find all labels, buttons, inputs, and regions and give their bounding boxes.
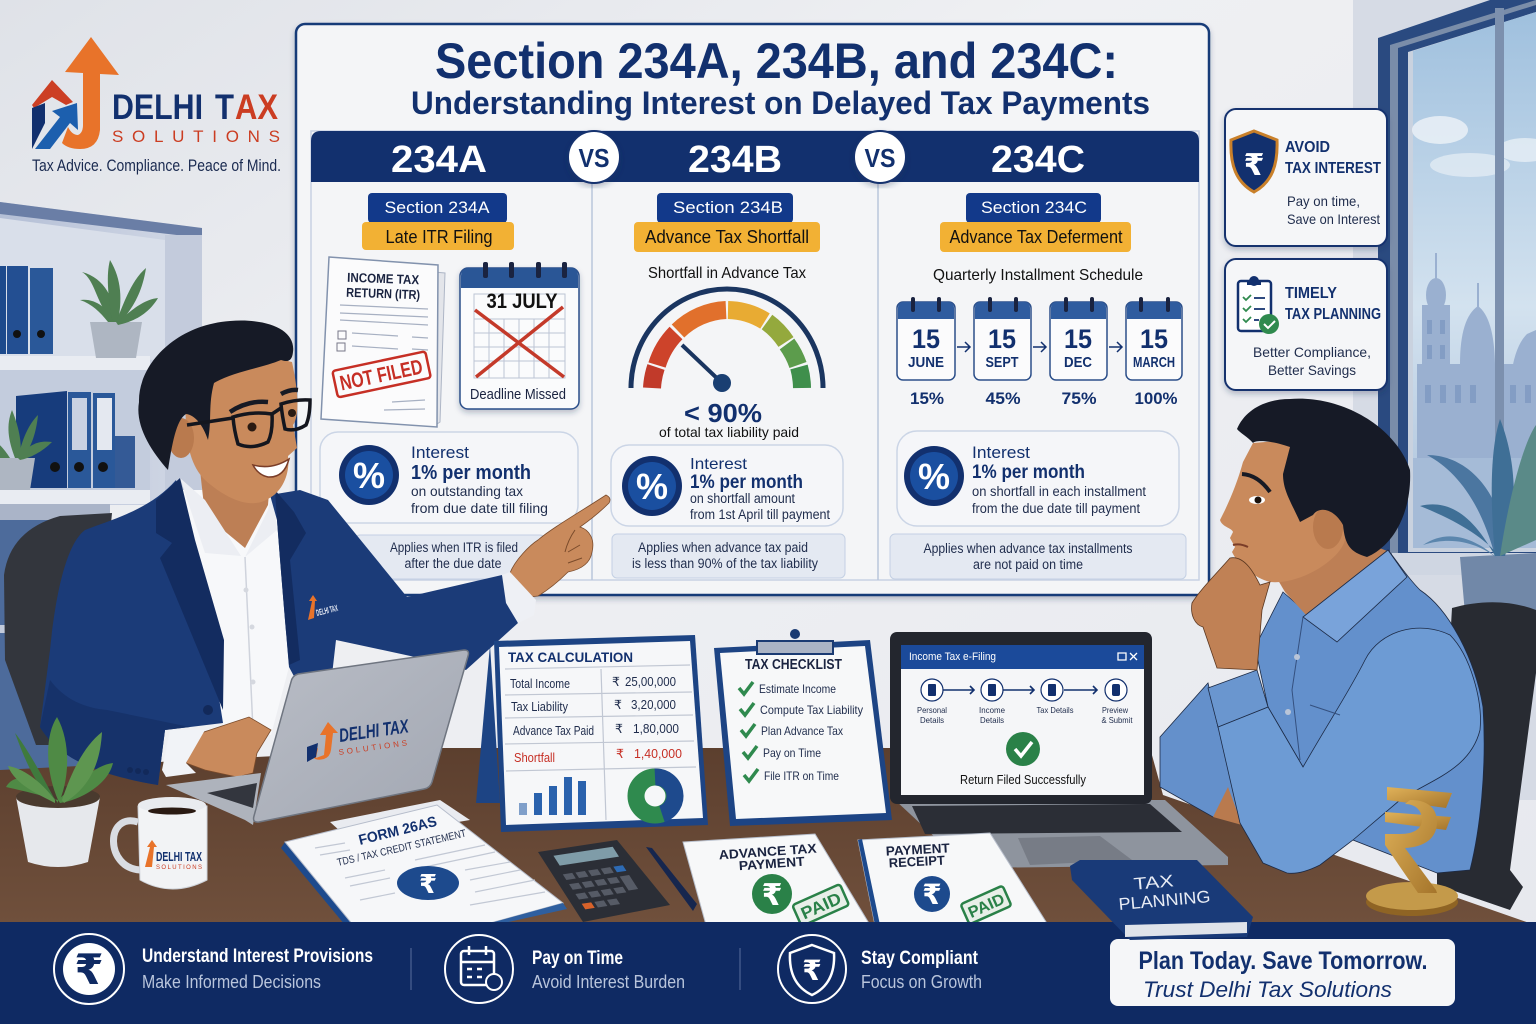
laptop logo text: DELHI TAX bbox=[338, 716, 411, 747]
step labels: Personal bbox=[917, 705, 947, 715]
table rows: 25,00,000 bbox=[625, 675, 676, 689]
table rows: 1,80,000 bbox=[633, 722, 679, 736]
calendar deadline missed: 31 JULY bbox=[486, 290, 558, 313]
interest box 234C: from the due date till payment bbox=[972, 501, 1140, 516]
laptop logo mark bbox=[307, 722, 338, 762]
panel: 234B advance tax shortfall bbox=[611, 193, 845, 578]
applies note 234A bbox=[355, 535, 545, 579]
skyline buildings bbox=[1417, 253, 1536, 462]
interest box 234A: Interest bbox=[411, 443, 469, 462]
illustration: advisor pointing at the board bbox=[4, 321, 610, 785]
interest box 234A bbox=[320, 432, 578, 523]
heading 234B: 234B bbox=[688, 139, 782, 181]
table rows: ₹ bbox=[614, 698, 622, 712]
table rows: Tax Liability bbox=[511, 700, 569, 714]
icon: percent bbox=[339, 445, 399, 505]
resting hand bbox=[186, 717, 271, 777]
laptop: income tax e-filing screen bbox=[890, 632, 1228, 868]
gauge caption: of total tax liability paid bbox=[659, 424, 799, 440]
document: payment receipt bbox=[858, 833, 1048, 925]
panel: 234C advance tax deferment bbox=[890, 193, 1186, 579]
ITR document: RETURN (ITR) bbox=[346, 285, 420, 302]
success check bbox=[1006, 732, 1040, 766]
icon: rupee shield bbox=[1231, 131, 1277, 192]
calendar 15 March bbox=[1126, 297, 1182, 380]
illustration: calculator bbox=[538, 840, 670, 922]
table rows: ₹ bbox=[612, 675, 620, 689]
step labels: Details bbox=[980, 715, 1004, 725]
advance tax shortfall tag: Advance Tax Shortfall bbox=[645, 227, 809, 247]
checklist items: Compute Tax Liability bbox=[760, 703, 863, 717]
logo tagline: Tax Advice. Compliance. Peace of Mind. bbox=[32, 156, 281, 175]
calendar 15 June bbox=[897, 297, 955, 380]
document: payment receipt: PAYMENT bbox=[885, 840, 950, 859]
interest box 234B: from 1st April till payment bbox=[690, 507, 830, 522]
document: payment receipt: RECEIPT bbox=[888, 853, 945, 870]
illustration: potted plant on desk bbox=[6, 717, 113, 867]
icon: checklist clipboard bbox=[1238, 276, 1279, 334]
client far hand bbox=[1213, 787, 1242, 825]
illustration: client thinking bbox=[1160, 399, 1536, 910]
callout: timely tax planning: Better Compliance, bbox=[1253, 344, 1371, 360]
footer item: stay compliant bbox=[778, 935, 982, 1003]
client collar bbox=[1303, 550, 1407, 642]
panel: 234A late ITR filing bbox=[320, 193, 579, 579]
VS badge 2 bbox=[854, 131, 906, 183]
calendar deadline missed bbox=[460, 262, 579, 409]
filing step flow bbox=[921, 679, 1127, 701]
footer band bbox=[0, 922, 1536, 1024]
shortfall label: Shortfall in Advance Tax bbox=[648, 265, 806, 282]
installment percentages: 100% bbox=[1134, 389, 1178, 408]
callout: timely tax planning bbox=[1225, 259, 1387, 390]
table rows bbox=[510, 675, 679, 738]
VS badge 2: VS bbox=[864, 143, 896, 173]
client neck bbox=[1275, 535, 1390, 616]
illustration: logo coffee mug: DELHI TAX bbox=[156, 849, 202, 864]
pointing hand bbox=[510, 495, 610, 597]
callout: avoid tax interest bbox=[1225, 109, 1387, 246]
ITR document: INCOME TAX bbox=[347, 270, 420, 287]
document: advance tax payment: ₹ bbox=[762, 879, 782, 912]
ITR document bbox=[321, 257, 445, 427]
NOT FILED stamp: NOT FILED bbox=[338, 355, 425, 395]
book: tax planning: TAX bbox=[1133, 871, 1174, 894]
table rows: Total Income bbox=[510, 677, 570, 691]
VS badge 1 bbox=[568, 131, 620, 183]
VS badge 1: VS bbox=[578, 143, 610, 173]
applies note 234A: Applies when ITR is filed bbox=[390, 540, 518, 555]
donut chart bbox=[636, 777, 675, 815]
callout: timely tax planning: TAX PLANNING bbox=[1285, 306, 1381, 323]
section 234C pill bbox=[966, 193, 1101, 223]
bar chart bbox=[519, 777, 586, 815]
interest box 234B: on shortfall amount bbox=[690, 491, 795, 506]
card: tax checklist bbox=[714, 629, 892, 826]
applies note 234B bbox=[612, 534, 845, 578]
applies note 234B: is less than 90% of the tax liability bbox=[632, 556, 818, 571]
callout: avoid tax interest: Pay on time, bbox=[1287, 193, 1360, 209]
heading 234C: 234C bbox=[991, 139, 1085, 181]
late ITR filing tag: Late ITR Filing bbox=[386, 227, 492, 247]
icon: percent bbox=[622, 456, 682, 516]
document: payment receipt: ₹ bbox=[922, 879, 942, 910]
calendar 15 March: 15 bbox=[1140, 324, 1168, 354]
logo subtitle: SOLUTIONS bbox=[112, 127, 280, 146]
calendar 15 Sept: 15 bbox=[988, 324, 1016, 354]
client near arm bbox=[1218, 628, 1480, 873]
company logo: Delhi Tax Solutions: T bbox=[215, 88, 234, 127]
interest box 234A: from due date till filing bbox=[411, 500, 548, 516]
table rows: 3,20,000 bbox=[631, 698, 676, 712]
calendar deadline missed: Deadline Missed bbox=[470, 386, 566, 403]
installment percentages: 45% bbox=[986, 389, 1020, 408]
success message: Return Filed Successfully bbox=[960, 772, 1086, 787]
installment percentages bbox=[910, 389, 1178, 408]
icon: percent bbox=[904, 446, 964, 506]
table title: TAX CALCULATION bbox=[508, 649, 633, 665]
interest box 234C: on shortfall in each installment bbox=[972, 484, 1146, 499]
heading 234A: 234A bbox=[391, 139, 487, 181]
applies note 234C: are not paid on time bbox=[973, 557, 1083, 572]
installment percentages: 75% bbox=[1062, 389, 1096, 408]
illustration: advisor pointing at the board: DELHI TAX bbox=[315, 603, 339, 618]
footer item: understand interest: ₹ bbox=[74, 946, 104, 993]
under 90 percent figure: < 90% bbox=[684, 398, 762, 428]
checklist title: TAX CHECKLIST bbox=[745, 657, 842, 673]
callout: timely tax planning: Better Savings bbox=[1268, 362, 1356, 378]
window plant bbox=[1420, 419, 1536, 625]
callout: avoid tax interest: Save on Interest bbox=[1287, 211, 1380, 227]
footer item: stay compliant: ₹ bbox=[802, 955, 822, 986]
checklist items: Plan Advance Tax bbox=[761, 724, 843, 738]
checklist items bbox=[739, 682, 863, 783]
client chair bbox=[1437, 602, 1536, 910]
interest box 234B bbox=[611, 445, 843, 526]
advance tax deferment tag bbox=[940, 222, 1131, 252]
window with city skyline bbox=[1378, 0, 1536, 575]
footer item: understand interest: Make Informed Decisions bbox=[142, 972, 321, 992]
client hand on chin bbox=[1192, 558, 1270, 670]
advisor head bbox=[138, 321, 310, 503]
section 234A pill: Section 234A bbox=[384, 198, 490, 217]
illustration: silver laptop with logo: SOLUTIONS bbox=[338, 738, 408, 757]
calendar 15 Dec: 15 bbox=[1064, 324, 1092, 354]
shirt placket and buttons bbox=[1292, 617, 1340, 760]
callout: avoid tax interest: AVOID bbox=[1285, 139, 1330, 156]
footer item: pay on time: Pay on Time bbox=[532, 948, 623, 969]
advisor chair bbox=[4, 513, 112, 745]
card: tax calculation: 1,40,000 bbox=[634, 747, 682, 761]
icon: percent: % bbox=[918, 456, 950, 497]
document: advance tax payment: PAYMENT bbox=[738, 854, 805, 873]
advisor neck and shirt bbox=[180, 470, 289, 735]
section 234A pill bbox=[368, 193, 507, 223]
step labels: Details bbox=[920, 715, 944, 725]
card: tax calculation bbox=[476, 635, 708, 832]
screen title: Income Tax e-Filing bbox=[909, 651, 996, 663]
arrow bbox=[957, 342, 970, 352]
step labels: Tax Details bbox=[1036, 705, 1074, 715]
applies note 234B: Applies when advance tax paid bbox=[638, 540, 808, 555]
icon: percent: % bbox=[636, 466, 668, 507]
call to action box: Trust Delhi Tax Solutions bbox=[1143, 977, 1392, 1002]
client torso bbox=[1255, 550, 1484, 873]
calendar 15 Dec: DEC bbox=[1064, 354, 1092, 371]
callout: avoid tax interest: TAX INTEREST bbox=[1285, 160, 1381, 177]
company logo: Delhi Tax Solutions: AX bbox=[235, 88, 279, 127]
desk bbox=[0, 748, 1535, 925]
document: Form 26AS: TDS / TAX CREDIT STATEMENT bbox=[336, 827, 468, 869]
client head bbox=[1220, 399, 1410, 582]
bookshelf with binders and plants bbox=[0, 202, 202, 775]
interest box 234B: Interest bbox=[690, 456, 748, 473]
section 234B pill: Section 234B bbox=[673, 198, 783, 217]
checklist items: Estimate Income bbox=[759, 682, 836, 696]
applies note 234A: after the due date bbox=[404, 556, 502, 571]
main comparison board bbox=[296, 24, 1209, 595]
illustration: logo coffee mug: SOLUTIONS bbox=[156, 865, 202, 871]
footer item: understand interest bbox=[54, 934, 373, 1004]
interest box 234C bbox=[897, 431, 1179, 526]
applies note 234C: Applies when advance tax installments bbox=[924, 541, 1133, 556]
interest box 234B: 1% per month bbox=[690, 472, 803, 493]
card: tax calculation: Shortfall bbox=[514, 751, 555, 765]
jacket logo badge bbox=[308, 595, 339, 620]
step labels bbox=[917, 705, 1133, 725]
document: advance tax payment bbox=[683, 834, 870, 926]
table rows: ₹ bbox=[615, 722, 623, 736]
title: Section 234A, 234B, and 234C: bbox=[435, 33, 1118, 89]
card: tax calculation: ₹ bbox=[616, 747, 624, 761]
clipboard clip bbox=[757, 641, 833, 654]
document: advance tax payment: ADVANCE TAX bbox=[718, 841, 817, 862]
header band bbox=[311, 131, 1199, 182]
client far arm bbox=[1160, 683, 1255, 817]
footer item: pay on time bbox=[445, 935, 685, 1003]
section 234C pill: Section 234C bbox=[981, 198, 1087, 217]
calendar 15 Sept bbox=[974, 297, 1031, 380]
interest box 234A: on outstanding tax bbox=[411, 483, 523, 499]
footer item: stay compliant: Focus on Growth bbox=[861, 972, 982, 992]
arrow bbox=[1109, 342, 1122, 352]
applies note 234C bbox=[890, 534, 1186, 579]
logo mark: arrow and house bbox=[32, 37, 119, 149]
glasses bbox=[187, 400, 310, 447]
book: tax planning bbox=[1070, 860, 1253, 940]
call to action box bbox=[1110, 939, 1455, 1006]
section 234B pill bbox=[657, 193, 793, 223]
document: advance tax payment: PAID bbox=[798, 889, 844, 923]
table rows: Advance Tax Paid bbox=[513, 724, 594, 738]
document: Form 26AS: ₹ bbox=[419, 869, 437, 899]
calendar 15 Dec bbox=[1050, 297, 1107, 380]
subtitle: Understanding Interest on Delayed Tax Payments bbox=[411, 85, 1150, 121]
checklist items: File ITR on Time bbox=[764, 769, 839, 783]
schedule label: Quarterly Installment Schedule bbox=[933, 267, 1143, 284]
illustration: pen bbox=[646, 847, 697, 911]
step labels: & Submit bbox=[1102, 715, 1133, 725]
document: Form 26AS: FORM 26AS bbox=[357, 814, 439, 849]
advisor jacket and pointing arm bbox=[40, 480, 518, 785]
installment percentages: 15% bbox=[910, 389, 944, 408]
interest box 234C: 1% per month bbox=[972, 462, 1085, 483]
icon: percent: % bbox=[353, 455, 385, 496]
illustration: gold rupee statue bbox=[1366, 787, 1458, 916]
footer item: pay on time: Avoid Interest Burden bbox=[532, 972, 685, 992]
document: Form 26AS bbox=[281, 800, 567, 925]
illustration: logo coffee mug bbox=[113, 797, 207, 889]
calendar 15 June: 15 bbox=[912, 324, 940, 354]
book: tax planning: PLANNING bbox=[1118, 887, 1211, 914]
advance tax shortfall tag bbox=[634, 222, 820, 252]
document: payment receipt: PAID bbox=[966, 891, 1007, 922]
calendar 15 Sept: SEPT bbox=[986, 354, 1018, 371]
icon: rupee shield: ₹ bbox=[1244, 149, 1264, 182]
interest box 234A: 1% per month bbox=[411, 462, 531, 484]
checklist items: Pay on Time bbox=[763, 746, 821, 760]
callout: timely tax planning: TIMELY bbox=[1285, 285, 1337, 302]
logo wordmark: DELHI bbox=[112, 88, 203, 127]
calendar 15 March: MARCH bbox=[1133, 354, 1175, 371]
advance tax deferment tag: Advance Tax Deferment bbox=[950, 227, 1122, 247]
interest box 234C: Interest bbox=[972, 443, 1030, 462]
comparison table outline bbox=[311, 131, 1199, 580]
footer item: stay compliant: Stay Compliant bbox=[861, 948, 979, 969]
footer item: understand interest: Understand Interest Provisions bbox=[142, 946, 373, 967]
arrow bbox=[1033, 342, 1046, 352]
illustration: silver laptop with logo bbox=[166, 650, 468, 825]
step labels: Preview bbox=[1102, 705, 1129, 715]
step labels: Income bbox=[979, 705, 1005, 715]
calendar 15 June: JUNE bbox=[908, 354, 944, 371]
late ITR filing tag bbox=[362, 222, 514, 250]
call to action box: Plan Today. Save Tomorrow. bbox=[1138, 947, 1428, 975]
client cuff bbox=[1208, 670, 1268, 727]
gauge chart bbox=[631, 289, 823, 392]
company logo: Delhi Tax Solutions bbox=[32, 37, 281, 175]
